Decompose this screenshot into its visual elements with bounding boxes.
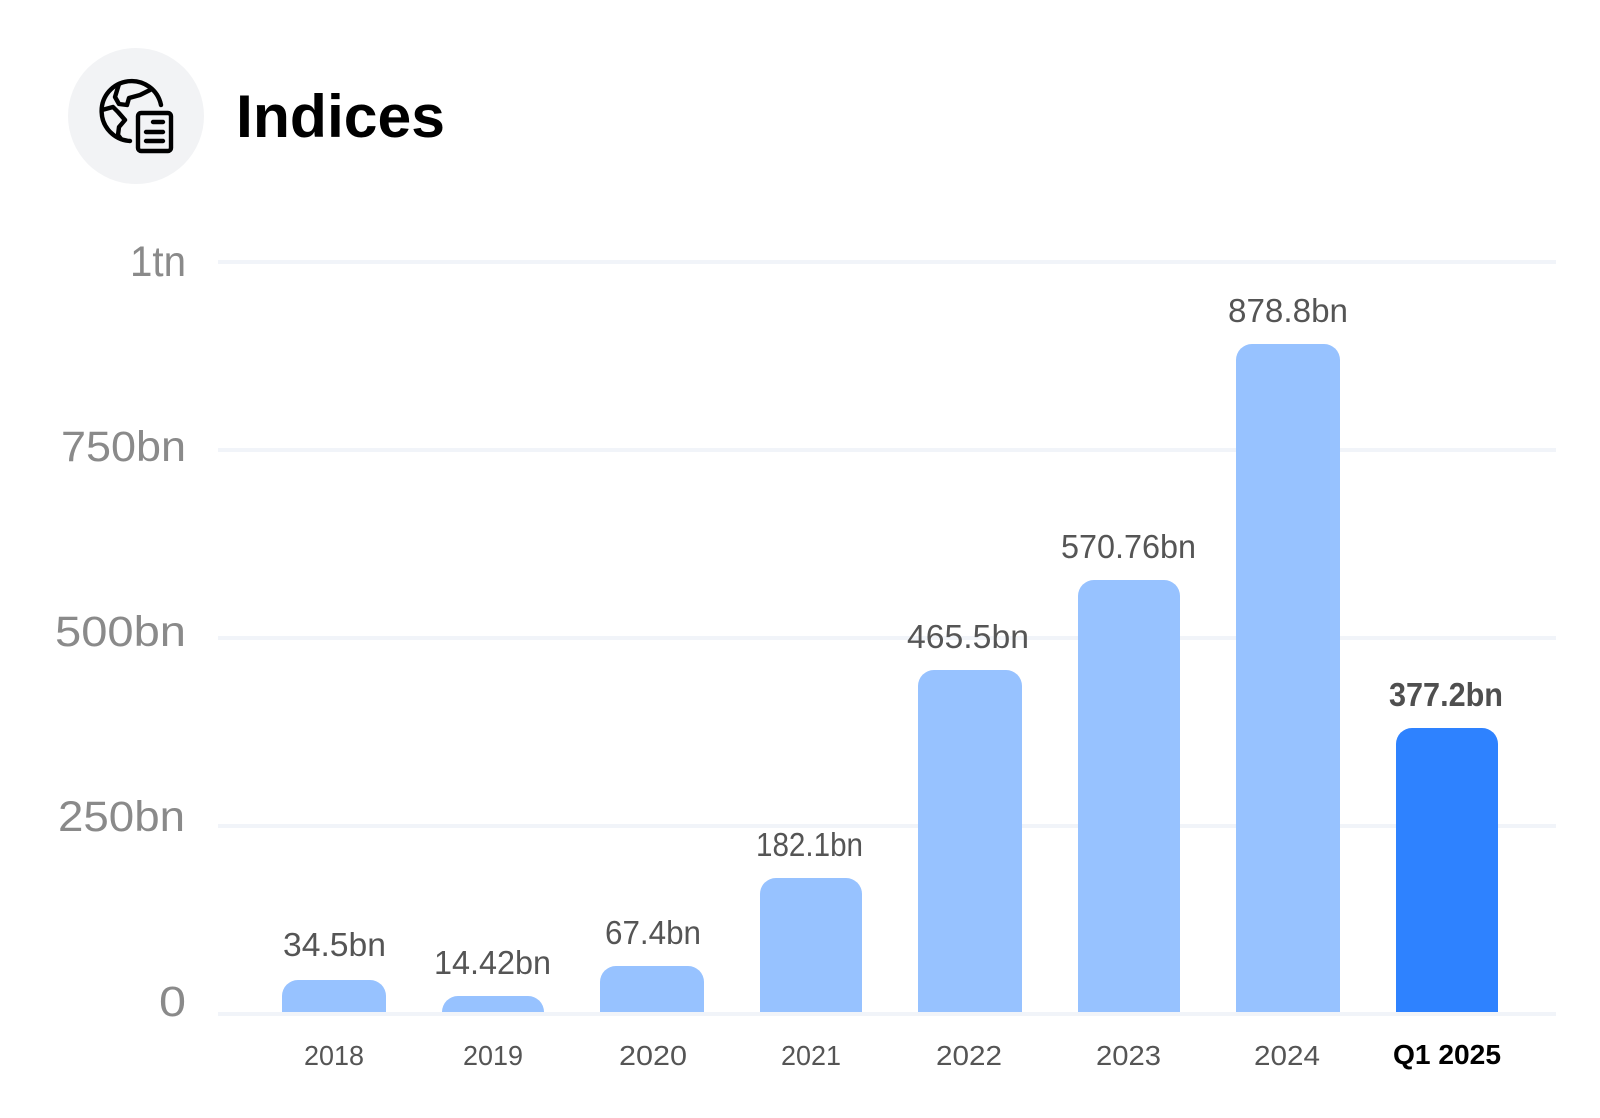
value: 377.2bn: 377.2bn xyxy=(1389,676,1503,713)
y label: 250bn: 250bn xyxy=(58,793,185,841)
bar: 2021 xyxy=(760,878,862,1012)
value: 878.8bn: 878.8bn xyxy=(1228,292,1348,329)
header xyxy=(68,48,445,184)
bar: 2024 xyxy=(1236,344,1340,1012)
x label: Q1 2025: Q1 2025 xyxy=(1393,1039,1501,1070)
icon: globe with document xyxy=(68,48,204,184)
bar: 2019 xyxy=(442,996,544,1012)
y axis labels xyxy=(55,238,186,1026)
bar: Q1 2025 xyxy=(1396,728,1498,1012)
value: 570.76bn: 570.76bn xyxy=(1061,528,1196,565)
title: Indices xyxy=(236,83,445,150)
bar: 2018 xyxy=(282,980,386,1012)
bar: 2023 xyxy=(1078,580,1180,1012)
bar: 2022 xyxy=(918,670,1022,1012)
value: 34.5bn: 34.5bn xyxy=(283,926,386,963)
x label: 2024: 2024 xyxy=(1254,1040,1320,1071)
y label: 0: 0 xyxy=(159,978,186,1026)
x label: 2018: 2018 xyxy=(304,1040,364,1071)
x label: 2023: 2023 xyxy=(1096,1040,1161,1071)
value: 182.1bn: 182.1bn xyxy=(756,826,863,863)
x label: 2021: 2021 xyxy=(781,1040,841,1071)
x label: 2022: 2022 xyxy=(936,1040,1002,1071)
bars xyxy=(282,344,1498,1012)
value: 14.42bn: 14.42bn xyxy=(434,944,551,981)
x axis labels xyxy=(304,1039,1501,1071)
value: 465.5bn: 465.5bn xyxy=(907,618,1029,655)
y label: 750bn: 750bn xyxy=(61,423,186,471)
y label: 1tn: 1tn xyxy=(130,238,186,286)
y label: 500bn: 500bn xyxy=(55,608,186,656)
value labels xyxy=(283,292,1503,981)
x label: 2019: 2019 xyxy=(463,1040,523,1071)
x label: 2020: 2020 xyxy=(619,1040,687,1071)
bar: 2020 xyxy=(600,966,704,1012)
value: 67.4bn: 67.4bn xyxy=(605,914,701,951)
